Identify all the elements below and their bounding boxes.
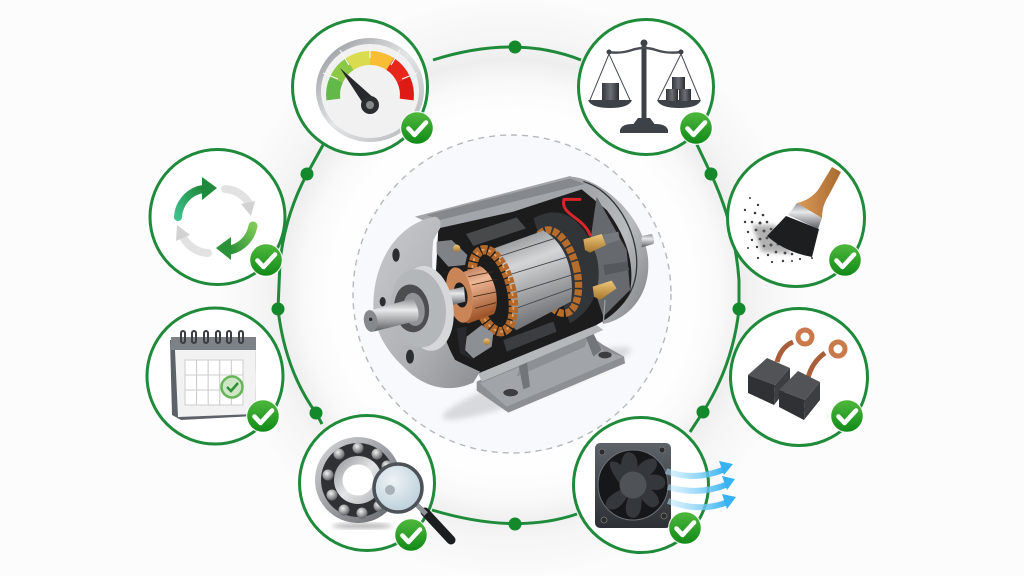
boss rim <box>396 262 459 354</box>
ring nodes <box>272 40 746 530</box>
fan screws <box>599 447 667 523</box>
shell top <box>415 176 593 228</box>
gauge arcs <box>333 58 407 100</box>
airflow arrows <box>666 461 736 509</box>
calendar back <box>170 337 256 420</box>
cap holes <box>380 248 414 364</box>
lens ball <box>385 485 395 495</box>
fan frame <box>595 443 671 528</box>
circle <box>292 20 428 154</box>
gauge dividers <box>323 44 417 79</box>
ground shadow <box>438 337 635 430</box>
front cap <box>373 217 480 388</box>
output shaft <box>364 298 419 332</box>
winding detail <box>464 245 521 336</box>
shaft end <box>363 309 379 333</box>
panel: balance scale <box>578 20 714 154</box>
grey arrow right <box>225 189 255 216</box>
circle <box>300 416 434 550</box>
magnifier lens <box>374 464 422 512</box>
rear bars <box>602 232 629 275</box>
panel: cooling fan <box>574 418 736 552</box>
inner disc <box>280 60 744 524</box>
bearing shadow <box>332 523 392 529</box>
left brush <box>748 358 790 405</box>
commutator lines <box>468 272 497 308</box>
dust cloud <box>752 225 792 254</box>
handle <box>797 167 841 218</box>
bearing inner <box>401 291 427 327</box>
brass terminal top <box>583 234 606 253</box>
central dashed circle <box>353 135 671 453</box>
right brush lead <box>808 342 845 378</box>
commutator bore <box>452 281 469 309</box>
boss face <box>386 266 451 351</box>
stator pole bottom <box>503 322 557 352</box>
rotor lines <box>498 238 572 308</box>
panel: rotation cycle <box>150 150 285 284</box>
check badge <box>249 243 283 277</box>
motor illustration <box>363 176 654 430</box>
left brush lead <box>777 330 812 362</box>
gauge needle <box>340 68 376 108</box>
flange groove <box>583 182 637 317</box>
gauge pivot <box>361 96 379 114</box>
commutator <box>451 266 497 323</box>
panel: dust brush <box>728 150 864 286</box>
scale <box>588 40 701 133</box>
base holes <box>503 352 612 396</box>
check badge <box>400 111 434 145</box>
base ribs <box>518 333 602 389</box>
green arrow top <box>178 177 217 217</box>
rings <box>181 331 243 343</box>
circle <box>147 308 283 444</box>
calendar grid <box>185 360 243 405</box>
circle <box>728 150 864 286</box>
fan well <box>598 450 668 520</box>
gauge face <box>321 44 419 138</box>
check badge <box>830 399 864 433</box>
connecting ring <box>278 47 739 524</box>
panel: carbon brushes <box>730 308 868 446</box>
motor interior <box>433 189 631 373</box>
bearing outer ring <box>315 437 401 523</box>
rotor <box>494 231 572 330</box>
lower shell strip <box>478 325 603 382</box>
front winding <box>464 245 521 336</box>
check badge <box>828 243 862 277</box>
rear bracket <box>533 212 599 323</box>
base top <box>480 335 623 407</box>
rear shaft <box>642 234 654 247</box>
circle <box>150 150 285 284</box>
fan blades <box>606 452 665 518</box>
rear winding <box>526 225 586 318</box>
dust specks <box>744 197 813 263</box>
rear grey cage <box>587 197 630 317</box>
panel: bearing inspection <box>300 416 451 552</box>
brass terminal bottom <box>593 281 617 323</box>
ball track <box>321 443 395 517</box>
right brush <box>779 371 820 420</box>
magnifier handle <box>415 503 451 540</box>
gauge bezel <box>316 38 424 142</box>
bristles <box>767 216 819 257</box>
ferrule <box>788 203 822 229</box>
panel: speed gauge <box>292 20 434 154</box>
bore <box>342 464 374 496</box>
calendar check <box>222 376 242 398</box>
calendar header <box>171 337 256 350</box>
circle <box>574 418 708 552</box>
bearing <box>391 282 432 335</box>
inner shaft <box>447 287 465 306</box>
fan hub <box>620 472 646 498</box>
dark lower block <box>457 327 473 360</box>
inner ring <box>334 456 382 504</box>
stator pole top <box>466 217 526 246</box>
panel: calendar <box>147 308 283 444</box>
commutator face <box>442 265 477 325</box>
check badge <box>246 399 280 433</box>
green arrow bottom <box>216 226 253 260</box>
brush holder bottom <box>465 325 493 358</box>
circle <box>578 20 714 154</box>
calendar page <box>175 350 256 417</box>
check badge <box>394 518 428 552</box>
circle <box>730 308 868 446</box>
grey arrow left <box>176 225 208 253</box>
rear flange <box>570 177 648 324</box>
brush holder top <box>437 240 467 267</box>
balls <box>322 442 392 518</box>
base foot <box>477 333 625 413</box>
check badge <box>679 111 713 145</box>
red wire <box>564 199 590 235</box>
check badge <box>668 511 702 545</box>
shaft bore <box>369 318 372 321</box>
shell highlight <box>427 178 585 220</box>
